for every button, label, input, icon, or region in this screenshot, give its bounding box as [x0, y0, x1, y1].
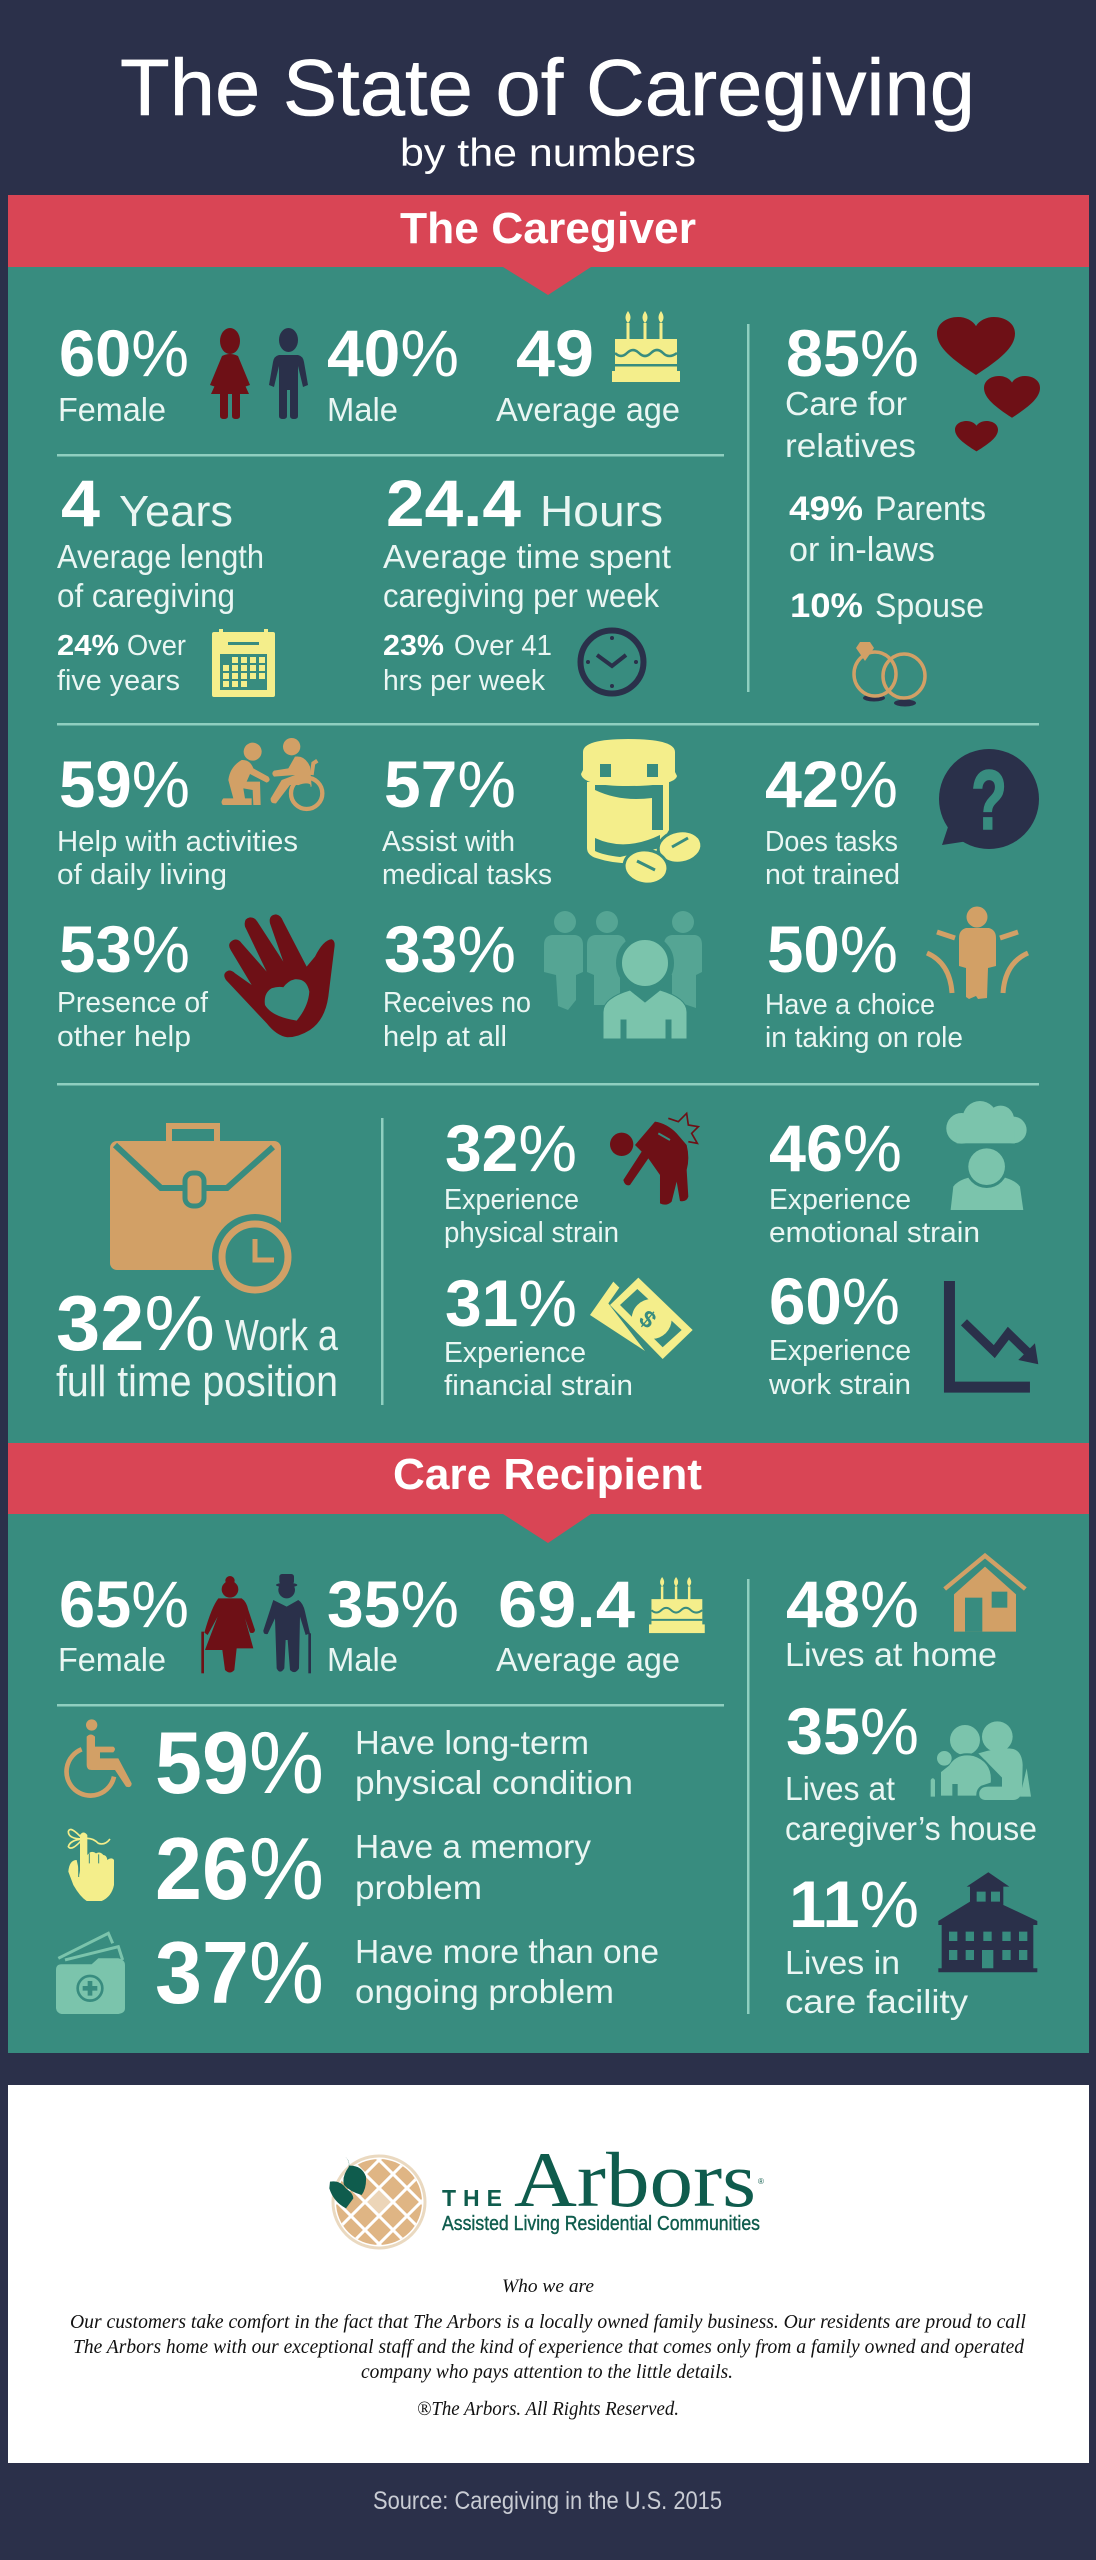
stat: 42% does tasks not trained: 42%	[765, 747, 898, 821]
stat: 24% over five years: Over	[127, 630, 186, 662]
stat: 26% memory problem: problem	[355, 1869, 482, 1906]
stat: 32% work full time: full time position	[56, 1357, 338, 1406]
stat: 49% parents or in-laws	[789, 490, 986, 569]
stat: 59% help with activities: 59%	[59, 747, 190, 821]
icon: question bubble: ?	[971, 753, 1007, 847]
stat: 48% lives at home: Lives at home	[785, 1636, 997, 1673]
section banner: the caregiver	[8, 195, 1089, 295]
stat: 32% work full time	[56, 1279, 338, 1406]
stat: 33% receives no help	[383, 912, 531, 1053]
stat: 11% lives in care facility: 11%	[789, 1867, 919, 1941]
icon: medical folder	[56, 1933, 125, 2014]
logo: the arbors: ®	[758, 2177, 764, 2186]
icon: briefcase with clock	[110, 1126, 298, 1300]
stat: 24.4 hours	[383, 466, 671, 614]
stat: 11% lives in care facility: care facility	[785, 1983, 969, 2020]
stat: 4 years: Years	[119, 487, 233, 536]
stat: 50% have a choice: 50%	[767, 912, 898, 986]
stat: 24% over five years: five years	[57, 665, 180, 697]
stat: 60% work strain	[768, 1264, 911, 1401]
stat: 10% spouse: 10%	[790, 587, 863, 625]
stat: 4 years: 4	[61, 466, 100, 540]
stat: 42% does tasks not trained: Does tasks	[765, 826, 898, 858]
stat: 26% memory problem	[155, 1819, 592, 1918]
stat: 35% lives at caregiver's house: Lives at	[785, 1770, 895, 1807]
icon: question bubble	[939, 749, 1039, 849]
stat: 23% over 41 hours: hrs per week	[383, 665, 545, 697]
text block: who we are: Our customers take comfort in the fact that The Arbors is a locally owned family business. Our residents are proud to call	[70, 2311, 1026, 2333]
stat: 65% female: 65%	[59, 1567, 189, 1641]
stat: 26% memory problem: 26%	[155, 1819, 324, 1918]
icon: birthday cake	[649, 1577, 705, 1633]
stat: 31% financial strain: financial strain	[444, 1370, 633, 1402]
stat: 60% female: 60%	[59, 316, 189, 390]
icon: person alone in group	[544, 911, 702, 1039]
stat: 53% presence of other help: 53%	[59, 912, 190, 986]
icon: woman	[210, 328, 250, 419]
icon: hearts	[937, 317, 1040, 451]
stat: 24.4 hours: caregiving per week	[383, 577, 659, 614]
stat: 53% presence of other help	[57, 912, 209, 1053]
stat: 33% receives no help: 33%	[384, 912, 516, 986]
text block: who we are: The Arbors home with our exceptional staff and the kind of experience that comes only from a family owned and operated	[73, 2336, 1025, 2358]
title	[120, 43, 975, 175]
text block: who we are: ®The Arbors. All Rights Reserved.	[417, 2398, 679, 2420]
stat: 60% female	[58, 316, 189, 428]
stat: 53% presence of other help: other help	[57, 1021, 191, 1053]
stat: 50% have a choice: in taking on role	[765, 1022, 963, 1054]
title: The State of Caregiving	[120, 43, 975, 132]
stat: 10% spouse: Spouse	[875, 587, 984, 625]
stat: 32% work full time: Work a	[225, 1311, 338, 1360]
stat: 37% ongoing problem	[155, 1923, 659, 2022]
stat: 31% financial strain: Experience	[444, 1337, 586, 1369]
stat: 60% female: Female	[58, 391, 166, 428]
icon: elderly man	[263, 1574, 311, 1673]
icon: couple	[931, 1721, 1031, 1800]
icon: clock	[580, 630, 644, 694]
icon: care facility building	[938, 1872, 1037, 1972]
logo: the arbors: Assisted Living Residential Communities	[442, 2213, 760, 2235]
stat: 48% lives at home	[785, 1567, 997, 1673]
stat: 11% lives in care facility: Lives in	[785, 1944, 900, 1981]
stat: 60% work strain: 60%	[769, 1264, 900, 1338]
icon: hand with heart	[224, 914, 335, 1037]
stat: 85% care for relatives	[785, 316, 919, 464]
stat: 33% receives no help: help at all	[383, 1021, 507, 1053]
stat: 4 years: of caregiving	[57, 577, 235, 614]
stat: average age 49: 49	[516, 316, 594, 390]
stat: 50% have a choice	[765, 912, 963, 1054]
stat: 33% receives no help: Receives no	[383, 987, 531, 1019]
icon: man	[269, 328, 308, 419]
stat: 4 years	[57, 466, 264, 614]
stat: average age 49	[496, 316, 680, 428]
stat: 57% assist with medical tasks	[382, 747, 552, 891]
icon: house	[945, 1556, 1025, 1632]
stat: 59% help with activities	[57, 747, 298, 891]
stat: 23% over 41 hours	[383, 630, 552, 697]
panel: about the arbors	[8, 2085, 1089, 2463]
stat: 31% financial strain: 31%	[445, 1266, 577, 1340]
text block: who we are: Who we are	[502, 2276, 594, 2297]
stat: average age 69.4	[496, 1567, 680, 1678]
stat: 49% parents or in-laws: 49%	[789, 490, 863, 528]
icon: wheelchair	[67, 1719, 132, 1796]
stat: 24.4 hours: Hours	[540, 487, 663, 536]
stat: 24% over five years	[57, 630, 186, 697]
stat: 40% male: Male	[327, 391, 398, 428]
icon: helper and wheelchair user	[221, 738, 322, 809]
stat: 23% over 41 hours: 23%	[383, 630, 444, 662]
stat: 50% have a choice: Have a choice	[765, 989, 935, 1021]
stat: 26% memory problem: Have a memory	[355, 1828, 592, 1865]
stat: 35% lives at caregiver's house	[785, 1694, 1037, 1847]
stat: 35% lives at caregiver's house: 35%	[786, 1694, 919, 1768]
stat: 37% ongoing problem: Have more than one	[355, 1933, 659, 1970]
icon: person with cloud	[946, 1101, 1027, 1210]
stat: 31% financial strain	[444, 1266, 633, 1402]
stat: 40% male	[327, 316, 459, 428]
stat: 65% female: Female	[58, 1641, 166, 1678]
stat: 37% ongoing problem: ongoing problem	[355, 1973, 614, 2010]
stat: 85% care for relatives: Care for	[785, 385, 907, 422]
stat: 35% lives at caregiver's house: caregiver’s house	[785, 1810, 1037, 1847]
stat: 59% help with activities: Help with activities	[57, 826, 298, 858]
stat: 4 years: Average length	[57, 538, 264, 575]
logo: the arbors: Arbors	[514, 2136, 756, 2223]
source note: Source: Caregiving in the U.S. 2015	[373, 2487, 722, 2515]
icon: pill bottle	[581, 739, 704, 887]
stat: 32% physical strain: Experience	[444, 1184, 579, 1216]
stat: 11% lives in care facility	[785, 1867, 969, 2020]
stat: 32% physical strain: physical strain	[444, 1217, 619, 1249]
stat: 59% long-term physical condition: 59%	[155, 1713, 324, 1812]
icon: money	[590, 1278, 693, 1359]
stat: 42% does tasks not trained	[765, 747, 900, 891]
stat: average age 69.4: Average age	[496, 1641, 680, 1678]
stat: 10% spouse	[790, 587, 984, 625]
stat: 59% long-term physical condition	[155, 1713, 633, 1812]
stat: 65% female	[58, 1567, 189, 1678]
icon: back pain	[610, 1113, 698, 1205]
title: by the numbers	[400, 132, 696, 175]
stat: 60% work strain: Experience	[769, 1335, 911, 1367]
stat: 57% assist with medical tasks: medical tasks	[382, 859, 552, 891]
stat: 32% physical strain	[444, 1111, 619, 1249]
section banner: the caregiver: The Caregiver	[400, 204, 696, 253]
stat: 85% care for relatives: relatives	[785, 427, 916, 464]
icon: person at crossroads	[927, 906, 1028, 999]
stat: 46% emotional strain: 46%	[769, 1111, 902, 1185]
stat: 59% help with activities: of daily living	[57, 859, 227, 891]
icon: elderly woman	[201, 1576, 255, 1673]
stat: 49% parents or in-laws: or in-laws	[789, 531, 935, 569]
stat: 46% emotional strain: Experience	[769, 1184, 911, 1216]
stat: 48% lives at home: 48%	[786, 1567, 919, 1641]
icon: finger with ribbon	[68, 1830, 114, 1901]
stat: 24% over five years: 24%	[57, 630, 119, 662]
stat: 32% work full time: 32%	[56, 1279, 215, 1367]
icon: wedding rings	[854, 642, 925, 706]
stat: 85% care for relatives: 85%	[786, 316, 919, 390]
icon: birthday cake	[612, 311, 680, 382]
stat: 35% male: Male	[327, 1641, 398, 1678]
stat: 59% long-term physical condition: physical condition	[355, 1764, 633, 1801]
stat: average age 69.4: 69.4	[498, 1567, 635, 1641]
panel: care recipient	[8, 1443, 1089, 2053]
stat: 37% ongoing problem: 37%	[155, 1923, 324, 2022]
stat: 59% long-term physical condition: Have long-term	[355, 1724, 589, 1761]
text block: who we are: company who pays attention to the little details.	[361, 2361, 733, 2383]
icon: calendar	[212, 629, 275, 697]
stat: 57% assist with medical tasks: 57%	[384, 747, 516, 821]
stat: 24.4 hours: Average time spent	[383, 538, 671, 575]
stat: 53% presence of other help: Presence of	[57, 987, 209, 1019]
stat: 57% assist with medical tasks: Assist with	[382, 826, 515, 858]
stat: 46% emotional strain: emotional strain	[769, 1217, 980, 1249]
stat: 35% male	[327, 1567, 459, 1678]
logo: the arbors: THE	[442, 2185, 502, 2211]
section banner: care recipient: Care Recipient	[393, 1450, 702, 1499]
stat: 46% emotional strain	[769, 1111, 980, 1249]
stat: 49% parents or in-laws: Parents	[875, 490, 986, 528]
stat: 40% male: 40%	[327, 316, 459, 390]
logo: the arbors	[329, 2152, 764, 2250]
stat: 24.4 hours: 24.4	[386, 466, 521, 540]
stat: 60% work strain: work strain	[768, 1369, 911, 1401]
stat: 32% physical strain: 32%	[445, 1111, 577, 1185]
text block: who we are	[70, 2276, 1026, 2420]
stat: 23% over 41 hours: Over 41	[454, 630, 552, 662]
icon: declining chart	[944, 1281, 1038, 1393]
stat: average age 49: Average age	[496, 391, 680, 428]
section banner: care recipient	[8, 1443, 1089, 1543]
stat: 42% does tasks not trained: not trained	[765, 859, 900, 891]
stat: 35% male: 35%	[327, 1567, 459, 1641]
icon: money: $	[634, 1305, 661, 1334]
panel: the caregiver	[8, 195, 1089, 1443]
